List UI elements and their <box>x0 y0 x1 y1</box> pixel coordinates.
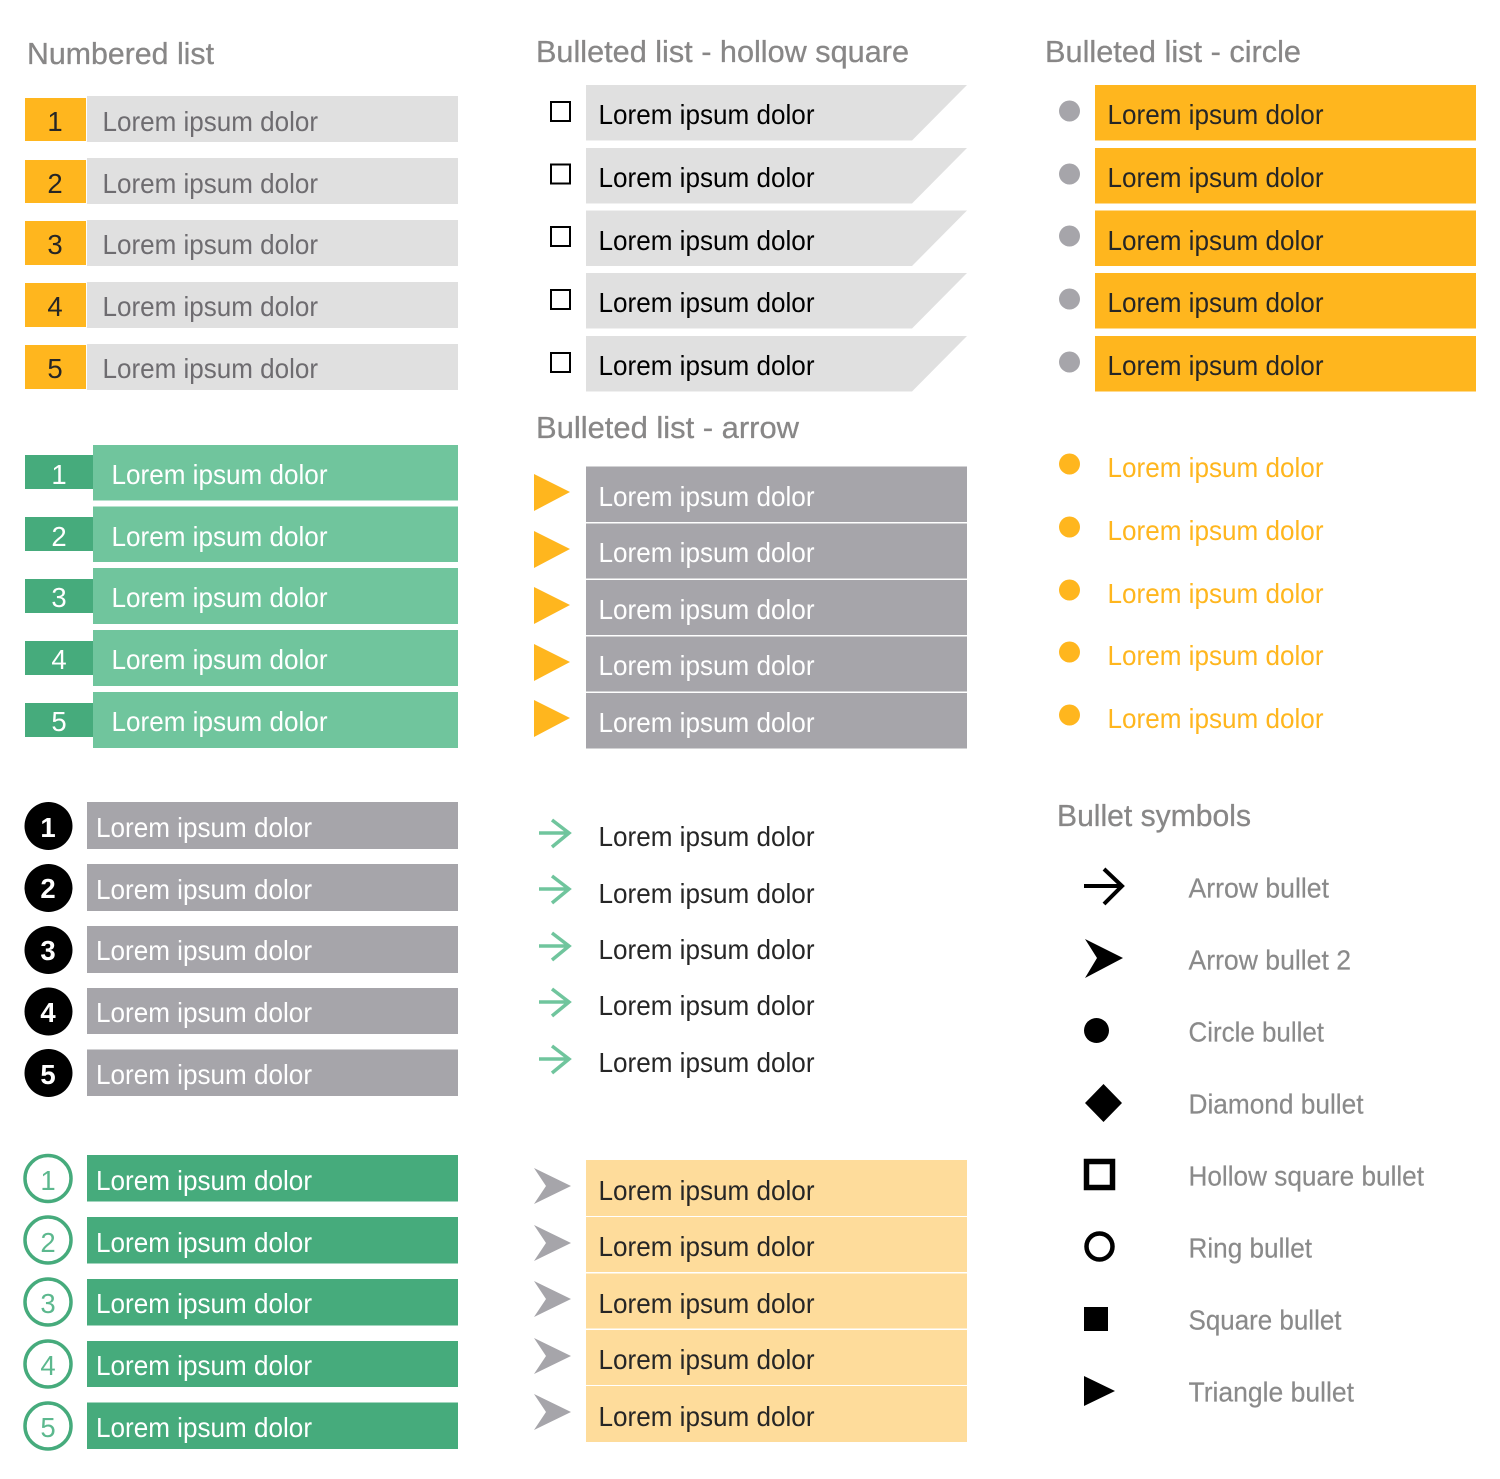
panel: numbered list black circles <box>24 802 458 1097</box>
panel: chevron arrow list on pale orange <box>534 1160 967 1442</box>
panel: line arrow list: Lorem ipsum dolor <box>598 821 814 852</box>
label: triangle bullet: Triangle bullet <box>1188 1376 1354 1408</box>
label: arrow bullet: Arrow bullet <box>1188 872 1329 904</box>
panel: orange circle list: Lorem ipsum dolor <box>1108 640 1324 671</box>
panel: numbered list green rings: 1 <box>40 1165 56 1196</box>
panel: orange circle list: Lorem ipsum dolor <box>1108 578 1324 609</box>
panel: numbered list green <box>25 445 458 748</box>
panel: line arrow list: Lorem ipsum dolor <box>598 878 814 909</box>
panel: numbered list orange and gray <box>25 96 458 390</box>
panel: numbered list green: 4 <box>51 644 67 675</box>
heading: hollow square list: Bulleted list - hollow square <box>536 35 909 69</box>
panel: numbered list orange and gray: 5 <box>47 353 63 384</box>
panel: line arrow list: Lorem ipsum dolor <box>598 990 814 1021</box>
panel: numbered list green: 5 <box>51 706 67 737</box>
panel: circle list on orange <box>1059 85 1476 392</box>
panel: numbered list green: Lorem ipsum dolor <box>112 459 328 490</box>
panel: hollow square list: Lorem ipsum dolor <box>598 99 814 130</box>
panel: numbered list black circles: 2 <box>40 873 56 904</box>
panel: orange circle list: Lorem ipsum dolor <box>1108 452 1324 483</box>
icon: ring bullet <box>1086 1234 1112 1260</box>
panel: numbered list black circles: Lorem ipsum dolor <box>96 997 312 1028</box>
heading: bullet symbols: Bullet symbols <box>1057 799 1251 833</box>
panel: numbered list orange and gray: Lorem ipsum dolor <box>102 168 318 199</box>
panel: chevron arrow list on pale orange: Lorem ipsum dolor <box>598 1288 814 1319</box>
panel: numbered list black circles: Lorem ipsum dolor <box>96 1059 312 1090</box>
panel: hollow square list: Lorem ipsum dolor <box>598 287 814 318</box>
icon: arrow bullet <box>1084 869 1122 904</box>
panel: triangle arrow list on gray <box>534 466 967 748</box>
label: diamond bullet: Diamond bullet <box>1188 1088 1364 1120</box>
panel: circle list on orange: Lorem ipsum dolor <box>1108 99 1324 130</box>
panel: numbered list orange and gray: 1 <box>47 106 63 137</box>
panel: orange circle list: Lorem ipsum dolor <box>1108 515 1324 546</box>
panel: numbered list black circles: Lorem ipsum dolor <box>96 812 312 843</box>
label: square bullet: Square bullet <box>1188 1304 1342 1336</box>
panel: triangle arrow list on gray: Lorem ipsum dolor <box>598 707 814 738</box>
panel: numbered list orange and gray: Lorem ipsum dolor <box>102 229 318 260</box>
panel: numbered list green rings: Lorem ipsum dolor <box>96 1227 312 1258</box>
panel: numbered list green: Lorem ipsum dolor <box>112 644 328 675</box>
panel: numbered list green rings: 4 <box>40 1350 56 1381</box>
panel: hollow square list: Lorem ipsum dolor <box>598 225 814 256</box>
panel: hollow square list: Lorem ipsum dolor <box>598 350 814 381</box>
panel: numbered list green rings <box>25 1155 458 1449</box>
panel: numbered list green rings: Lorem ipsum dolor <box>96 1412 312 1443</box>
panel: orange circle list <box>1059 452 1324 734</box>
panel: numbered list green rings: 5 <box>40 1412 56 1443</box>
panel: chevron arrow list on pale orange: Lorem ipsum dolor <box>598 1344 814 1375</box>
icon: diamond bullet <box>1085 1084 1122 1122</box>
panel: orange circle list: Lorem ipsum dolor <box>1108 703 1324 734</box>
panel: numbered list green: Lorem ipsum dolor <box>112 706 328 737</box>
icon: triangle bullet <box>1084 1376 1115 1406</box>
panel: numbered list green: 2 <box>51 521 67 552</box>
panel: numbered list orange and gray: Lorem ipsum dolor <box>102 106 318 137</box>
panel: hollow square list: Lorem ipsum dolor <box>598 162 814 193</box>
panel: numbered list green rings: Lorem ipsum dolor <box>96 1288 312 1319</box>
panel: triangle arrow list on gray: Lorem ipsum dolor <box>598 594 814 625</box>
icon: circle bullet <box>1084 1018 1109 1043</box>
panel: numbered list black circles: 5 <box>40 1059 56 1090</box>
panel: circle list on orange: Lorem ipsum dolor <box>1108 287 1324 318</box>
panel: bullet symbols legend <box>1084 869 1424 1408</box>
label: ring bullet: Ring bullet <box>1188 1232 1312 1264</box>
icon: arrow bullet 2 <box>1085 939 1123 978</box>
heading: arrow list: Bulleted list - arrow <box>536 411 800 445</box>
panel: numbered list green rings: Lorem ipsum dolor <box>96 1165 312 1196</box>
panel: numbered list green: 3 <box>51 582 67 613</box>
panel: circle list on orange: Lorem ipsum dolor <box>1108 350 1324 381</box>
panel: numbered list green: Lorem ipsum dolor <box>112 582 328 613</box>
panel: triangle arrow list on gray: Lorem ipsum dolor <box>598 481 814 512</box>
panel: numbered list black circles: 1 <box>40 812 56 843</box>
panel: triangle arrow list on gray: Lorem ipsum dolor <box>598 537 814 568</box>
panel: hollow square list <box>551 85 967 392</box>
panel: numbered list orange and gray: 2 <box>47 168 63 199</box>
heading: numbered list: Numbered list <box>27 37 215 71</box>
panel: numbered list orange and gray: 4 <box>47 291 63 322</box>
panel: numbered list black circles: 4 <box>40 997 56 1028</box>
panel: line arrow list: Lorem ipsum dolor <box>598 1047 814 1078</box>
panel: line arrow list <box>539 820 814 1078</box>
panel: triangle arrow list on gray: Lorem ipsum dolor <box>598 650 814 681</box>
panel: numbered list green rings: Lorem ipsum dolor <box>96 1350 312 1381</box>
icon: hollow square bullet <box>1086 1162 1112 1188</box>
panel: numbered list orange and gray: 3 <box>47 229 63 260</box>
heading: circle list: Bulleted list - circle <box>1045 35 1301 69</box>
panel: numbered list green: Lorem ipsum dolor <box>112 521 328 552</box>
label: hollow square bullet: Hollow square bullet <box>1188 1160 1424 1192</box>
panel: numbered list orange and gray: Lorem ipsum dolor <box>102 353 318 384</box>
panel: numbered list green rings: 2 <box>40 1227 56 1258</box>
panel: circle list on orange: Lorem ipsum dolor <box>1108 225 1324 256</box>
panel: chevron arrow list on pale orange: Lorem ipsum dolor <box>598 1175 814 1206</box>
panel: line arrow list: Lorem ipsum dolor <box>598 934 814 965</box>
panel: numbered list black circles: Lorem ipsum dolor <box>96 874 312 905</box>
panel: numbered list green: 1 <box>51 459 67 490</box>
panel: circle list on orange: Lorem ipsum dolor <box>1108 162 1324 193</box>
label: circle bullet: Circle bullet <box>1188 1016 1324 1048</box>
panel: chevron arrow list on pale orange: Lorem ipsum dolor <box>598 1231 814 1262</box>
panel: numbered list orange and gray: Lorem ipsum dolor <box>102 291 318 322</box>
label: arrow bullet 2: Arrow bullet 2 <box>1188 944 1351 976</box>
icon: square bullet <box>1084 1307 1108 1331</box>
panel: chevron arrow list on pale orange: Lorem ipsum dolor <box>598 1401 814 1432</box>
panel: numbered list black circles: Lorem ipsum dolor <box>96 935 312 966</box>
panel: numbered list green rings: 3 <box>40 1288 56 1319</box>
panel: numbered list black circles: 3 <box>40 935 56 966</box>
